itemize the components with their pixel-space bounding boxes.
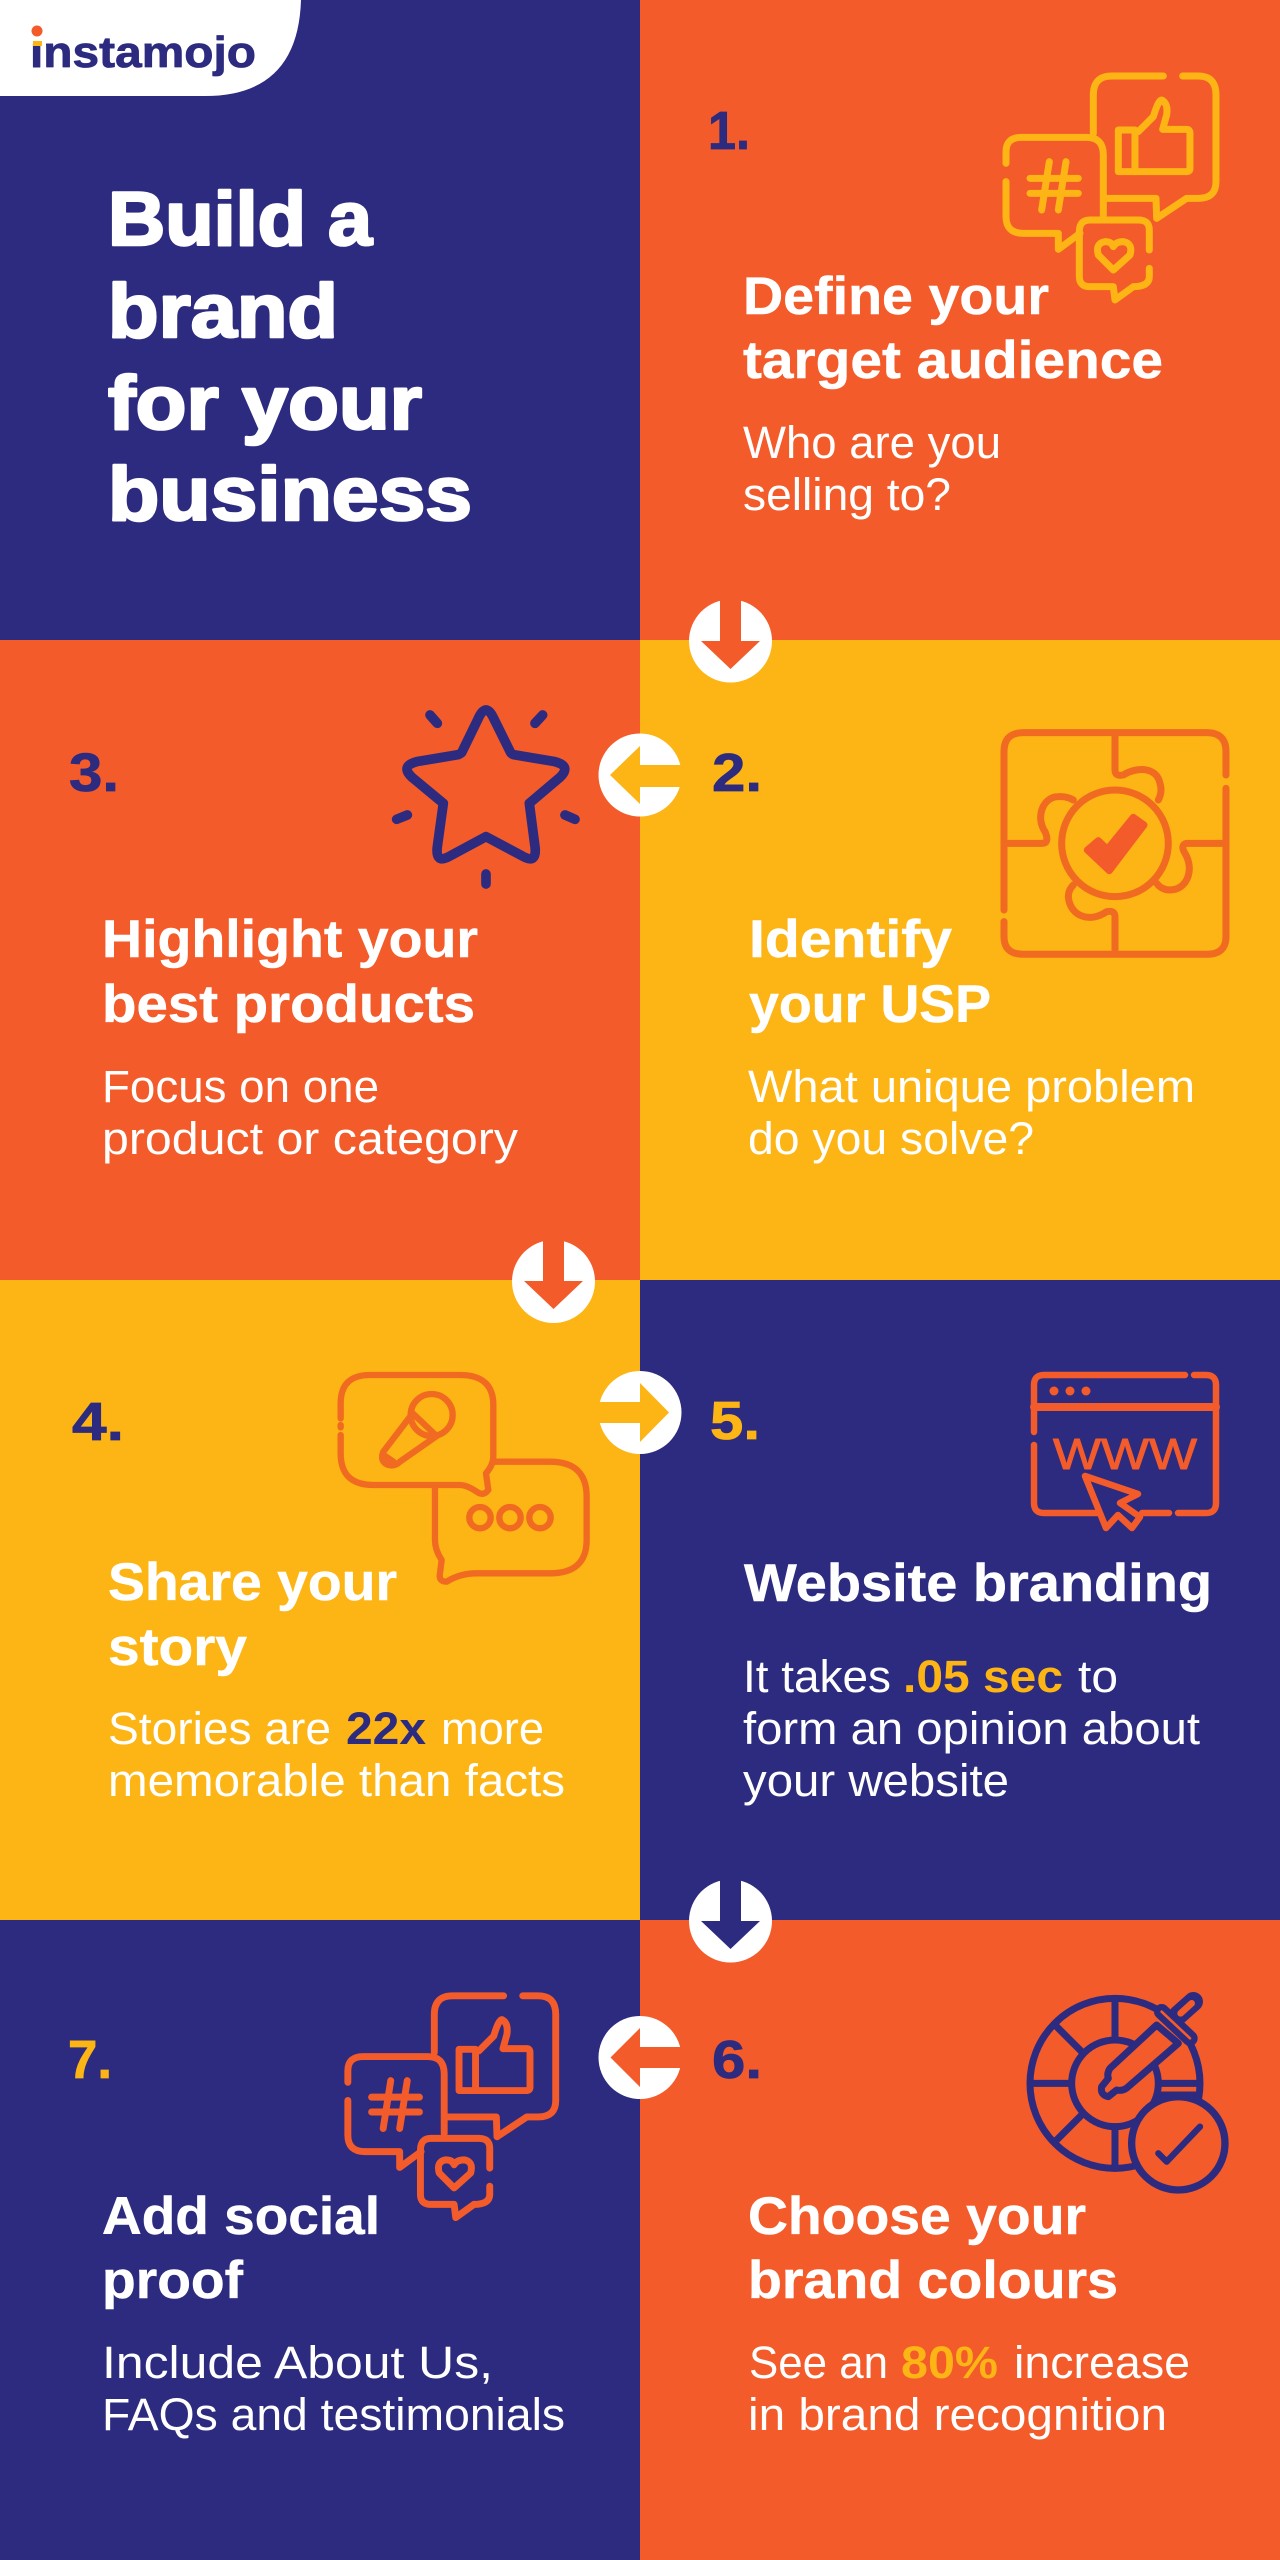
description: in brand recognition (748, 2389, 1167, 2440)
icon: social bubbles orange (348, 1996, 556, 2218)
icon: puzzle with check (1004, 733, 1226, 954)
description (102, 1061, 519, 1164)
heading: Identify (749, 910, 953, 969)
arrow: step 3 to 4 (512, 1237, 595, 1323)
arrow: step 4 to 5 (596, 1371, 682, 1454)
heading: best products (102, 975, 475, 1034)
heading: Define your (743, 267, 1049, 326)
description: 22x (346, 1703, 426, 1754)
description (108, 1703, 565, 1806)
heading: Share your (108, 1553, 397, 1612)
heading: Choose your (748, 2187, 1086, 2246)
arrow: step 6 to 7 (598, 2016, 684, 2099)
icon: microphone and chat bubbles (341, 1375, 587, 1582)
icon: colour wheel with dropper and check (1030, 1998, 1225, 2190)
description: It takes (743, 1651, 891, 1702)
heading: your USP (749, 975, 991, 1034)
arrow: step 5 to 6 (689, 1877, 772, 1962)
panel: title (0, 0, 640, 640)
description (743, 417, 1001, 520)
heading: Highlight your (102, 910, 478, 969)
description: to (1078, 1651, 1118, 1702)
description: form an opinion about (743, 1703, 1201, 1754)
description: FAQs and testimonials (102, 2389, 565, 2440)
heading: Website branding (744, 1554, 1212, 1613)
description: memorable than facts (108, 1755, 565, 1806)
description: See an (749, 2337, 888, 2388)
heading (749, 910, 991, 1034)
description: Who are you (743, 417, 1001, 468)
heading: Add social (102, 2187, 380, 2246)
description: your website (743, 1755, 1009, 1806)
title text: brand (108, 269, 338, 354)
description: What unique problem (748, 1061, 1195, 1112)
number 2: 2. (712, 743, 762, 803)
panel: step 4 share your story (0, 1280, 640, 1920)
description: product or category (102, 1113, 519, 1164)
description: Focus on one (102, 1061, 379, 1112)
description: 80% (901, 2337, 998, 2388)
description (743, 1651, 1201, 1806)
logo: instamojo (0, 0, 301, 96)
panel: step 5 website branding (640, 1280, 1280, 1920)
description: increase (1014, 2337, 1190, 2388)
logo: instamojo: instamojo (30, 28, 256, 77)
description (748, 1061, 1195, 1164)
description: selling to? (743, 469, 951, 520)
description: .05 sec (903, 1651, 1063, 1702)
number 5: 5. (710, 1391, 760, 1451)
icon: browser window with cursor (1034, 1375, 1216, 1528)
title text (108, 177, 472, 537)
icon: browser window with cursor: WWW (1053, 1430, 1198, 1479)
heading: target audience (743, 331, 1163, 390)
description: Include About Us, (102, 2337, 493, 2388)
number 6: 6. (712, 2030, 762, 2090)
description: do you solve? (748, 1113, 1034, 1164)
icon: social bubbles yellow (1006, 76, 1216, 300)
panel: step 2 identify USP (640, 640, 1280, 1280)
title text: business (108, 452, 472, 537)
description (102, 2337, 565, 2440)
number 7: 7. (68, 2030, 112, 2090)
panel: step 1 define target audience (640, 0, 1280, 640)
heading (108, 1553, 397, 1677)
icon: star (397, 710, 575, 884)
heading: proof (102, 2251, 243, 2310)
arrow: step 1 to 2 (689, 597, 772, 682)
heading: brand colours (748, 2251, 1118, 2310)
number 4: 4. (72, 1392, 124, 1452)
heading: story (108, 1618, 248, 1677)
heading (748, 2187, 1118, 2310)
heading (102, 2187, 380, 2310)
panel: step 3 highlight best products (0, 640, 640, 1280)
description (748, 2337, 1190, 2440)
description: more (441, 1703, 544, 1754)
panel: step 7 add social proof (0, 1920, 640, 2560)
number 3: 3. (69, 743, 119, 803)
title text: for your (108, 361, 422, 446)
heading (102, 910, 478, 1034)
panel: step 6 choose brand colours (640, 1920, 1280, 2560)
title text: Build a (108, 177, 373, 262)
arrow: step 2 to 3 (598, 734, 684, 816)
number 1: 1. (708, 101, 750, 161)
description: Stories are (108, 1703, 331, 1754)
heading (743, 267, 1163, 390)
